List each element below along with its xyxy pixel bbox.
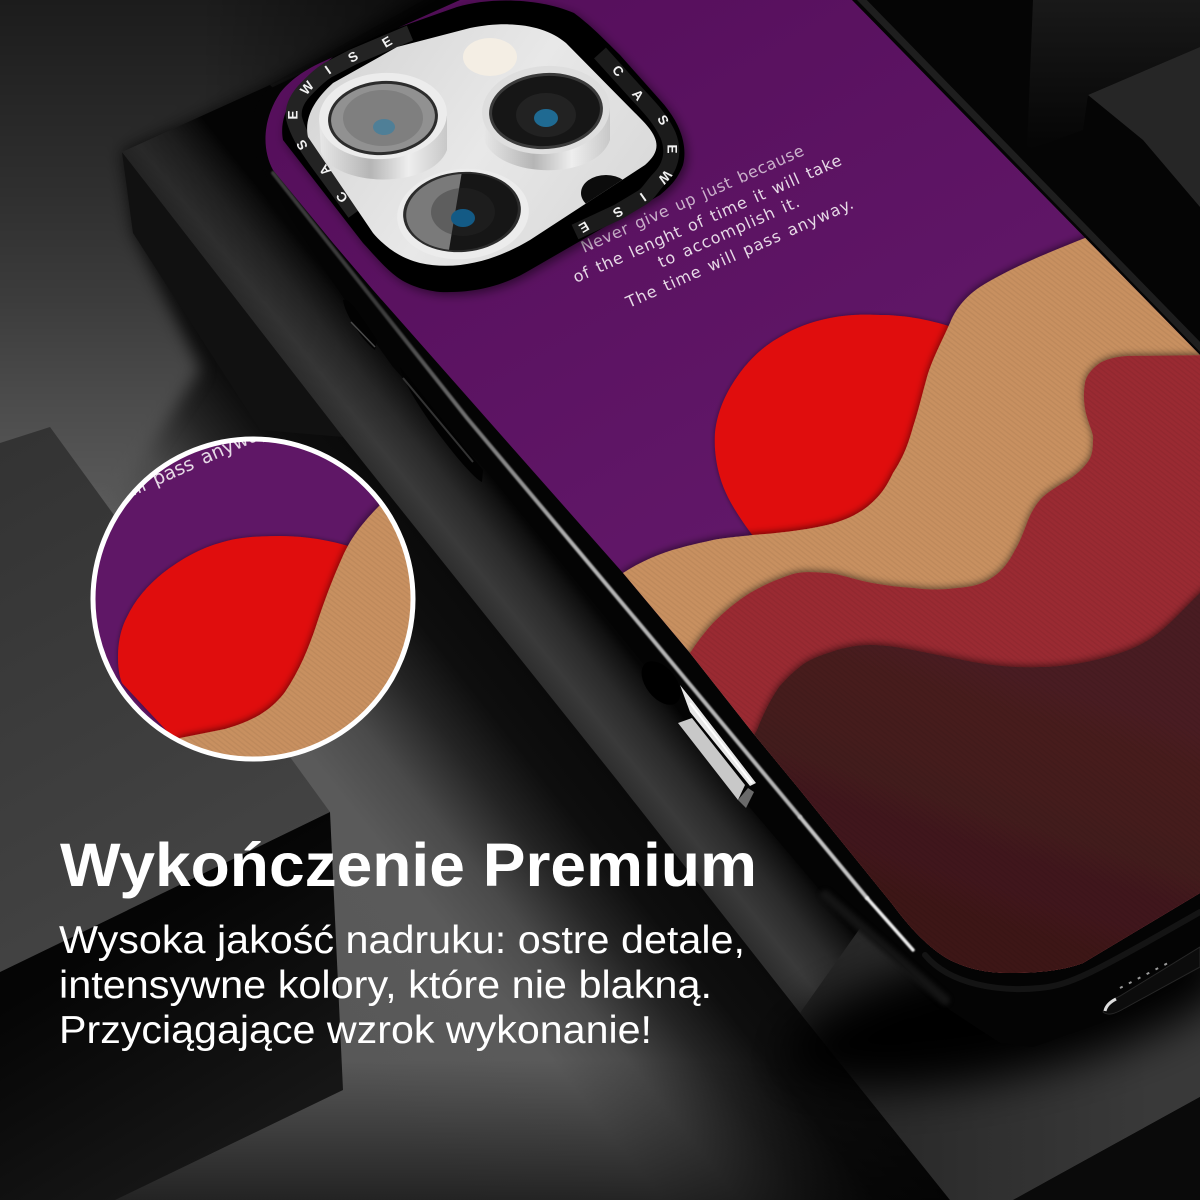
camera ring brand lettering: E — [379, 33, 395, 51]
red sun — [715, 315, 955, 540]
quote text on case: of the lenght of time it will take — [570, 151, 844, 287]
heading: Wykończenie Premium — [60, 831, 757, 899]
speaker grille — [1103, 947, 1200, 1014]
inset red sun — [118, 536, 355, 745]
quote text on case: The time will pass anyway. — [622, 194, 856, 312]
inset quote fragment: ill pass anyway. — [126, 418, 276, 501]
lens bottom — [403, 172, 528, 259]
camera ring brand lettering: A — [629, 86, 647, 104]
microphone hole — [581, 175, 622, 204]
fabric texture — [624, 238, 1196, 650]
camera ring brand lettering: S — [610, 203, 626, 221]
camera ring brand lettering: A — [316, 161, 334, 178]
camera ring brand lettering: E — [576, 218, 592, 236]
camera ring brand lettering — [286, 33, 680, 236]
body text — [59, 919, 745, 1052]
camera ring brand lettering: I — [322, 63, 334, 77]
camera ring brand lettering: C — [333, 188, 351, 205]
camera ring brand lettering: E — [286, 110, 300, 120]
ring lettering band — [294, 33, 671, 232]
camera ring brand lettering: S — [654, 112, 672, 128]
magnified detail inset circle — [90, 436, 416, 762]
flash — [463, 38, 517, 76]
camera ring brand lettering: W — [297, 78, 317, 98]
dark maroon dune layer — [751, 586, 1200, 973]
side buttons — [343, 300, 483, 482]
case rim highlights — [273, 0, 1200, 1000]
phone case body — [253, 0, 1200, 1047]
camera ring brand lettering: C — [609, 62, 627, 80]
camera ring brand lettering: W — [655, 167, 675, 187]
camera ring — [282, 0, 684, 292]
silver slider button — [634, 654, 756, 808]
camera ring brand lettering: S — [293, 137, 311, 153]
camera ring brand lettering: S — [345, 48, 361, 66]
body text: intensywne kolory, które nie blakną. — [59, 964, 712, 1007]
tan dune layer — [600, 225, 1200, 1000]
printed phone back artwork — [266, 0, 1200, 973]
quote text on case: to accomplish it. — [655, 192, 802, 272]
quote text on case: Never give up just because — [578, 141, 807, 257]
lower-left block — [0, 427, 343, 1200]
camera ring brand lettering: E — [664, 144, 680, 154]
lens top-right — [479, 62, 613, 170]
red-brown dune layer — [686, 348, 1200, 973]
camera glass plate — [307, 24, 656, 266]
lens top-left — [316, 69, 450, 180]
camera ring brand lettering: I — [637, 190, 649, 204]
inset tan dune — [174, 502, 410, 756]
camera module — [282, 0, 684, 292]
body text: Wysoka jakość nadruku: ostre detale, — [59, 919, 745, 962]
body text: Przyciągające wzrok wykonanie! — [59, 1009, 652, 1052]
